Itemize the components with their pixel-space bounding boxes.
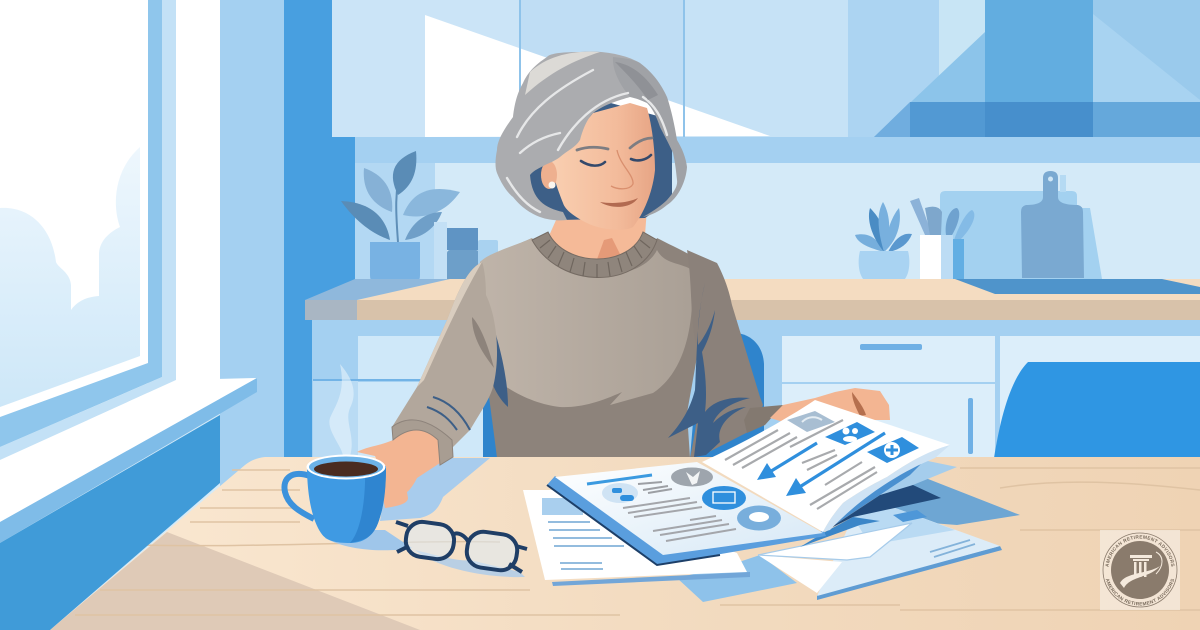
icon: down arrow — [671, 468, 713, 486]
wall strip and blue column — [220, 0, 355, 490]
hair left sweep — [496, 51, 642, 220]
small plant on counter — [855, 202, 912, 284]
logo ring text: AMERICAN RETIREMENT ADVISORS — [1106, 535, 1174, 567]
icon: gray badge — [787, 411, 835, 432]
icon: person — [602, 483, 638, 503]
booklet cover edge — [547, 476, 826, 565]
arrow two — [786, 433, 885, 496]
lower cabinets — [312, 320, 1200, 458]
table shadow — [50, 532, 420, 630]
left letter — [523, 490, 750, 586]
clouds outside window — [0, 147, 140, 407]
woman — [392, 51, 890, 463]
left sleeve — [392, 262, 497, 463]
eyes — [581, 155, 651, 166]
countertop — [305, 279, 1200, 320]
range hood — [874, 0, 1200, 137]
booklet right page — [702, 400, 950, 532]
back pages of booklet — [800, 460, 957, 547]
blue folder behind — [677, 555, 797, 602]
coffee cup — [284, 454, 386, 543]
upper cabinets — [332, 0, 1200, 137]
company logo badge: AMERICAN RETIREMENT ADVISORS — [1106, 578, 1174, 606]
icon: piggy — [737, 506, 781, 530]
potted plant — [341, 151, 460, 285]
chest highlight — [480, 238, 701, 407]
cutting board — [1021, 171, 1084, 278]
booklet left page — [555, 462, 823, 555]
right cuff — [744, 405, 783, 433]
window — [0, 0, 220, 460]
collar — [532, 232, 657, 278]
hair highlights — [507, 70, 667, 212]
eyeglasses — [396, 520, 527, 572]
nose — [611, 150, 633, 189]
table — [50, 457, 1200, 630]
icon: plus badge — [867, 437, 919, 463]
left hand — [357, 430, 440, 508]
right hand — [770, 388, 890, 430]
face — [548, 103, 655, 230]
canisters — [434, 222, 498, 283]
document stack — [523, 400, 1020, 602]
utensil jar — [910, 198, 974, 284]
steam — [329, 364, 354, 456]
chair behind woman — [483, 333, 764, 458]
icon: people badge — [825, 422, 875, 445]
right sleeve — [687, 250, 763, 458]
ear — [541, 161, 557, 189]
glasses shadow — [415, 550, 525, 577]
navy folds right — [668, 283, 750, 457]
company logo badge — [1100, 530, 1180, 610]
shelf band and backsplash — [355, 137, 1200, 283]
left cuff — [392, 420, 453, 465]
earring — [548, 182, 556, 188]
mouth — [600, 198, 638, 207]
hair right sweep — [613, 57, 687, 217]
eyebrows — [577, 138, 652, 150]
blue chair right — [994, 362, 1200, 458]
soft sheet shadow — [853, 477, 1020, 525]
hand shadow on table — [380, 458, 490, 521]
cup shadow — [325, 530, 412, 550]
navy gap under left arm — [487, 307, 508, 407]
icon: document — [702, 486, 746, 510]
sweater torso — [480, 238, 720, 458]
window sill — [0, 378, 257, 630]
logo column emblem — [1120, 552, 1162, 588]
arrow one — [757, 443, 817, 480]
back hair — [525, 100, 672, 220]
envelope — [758, 523, 912, 593]
right letter — [817, 505, 1002, 600]
neck — [548, 195, 648, 260]
